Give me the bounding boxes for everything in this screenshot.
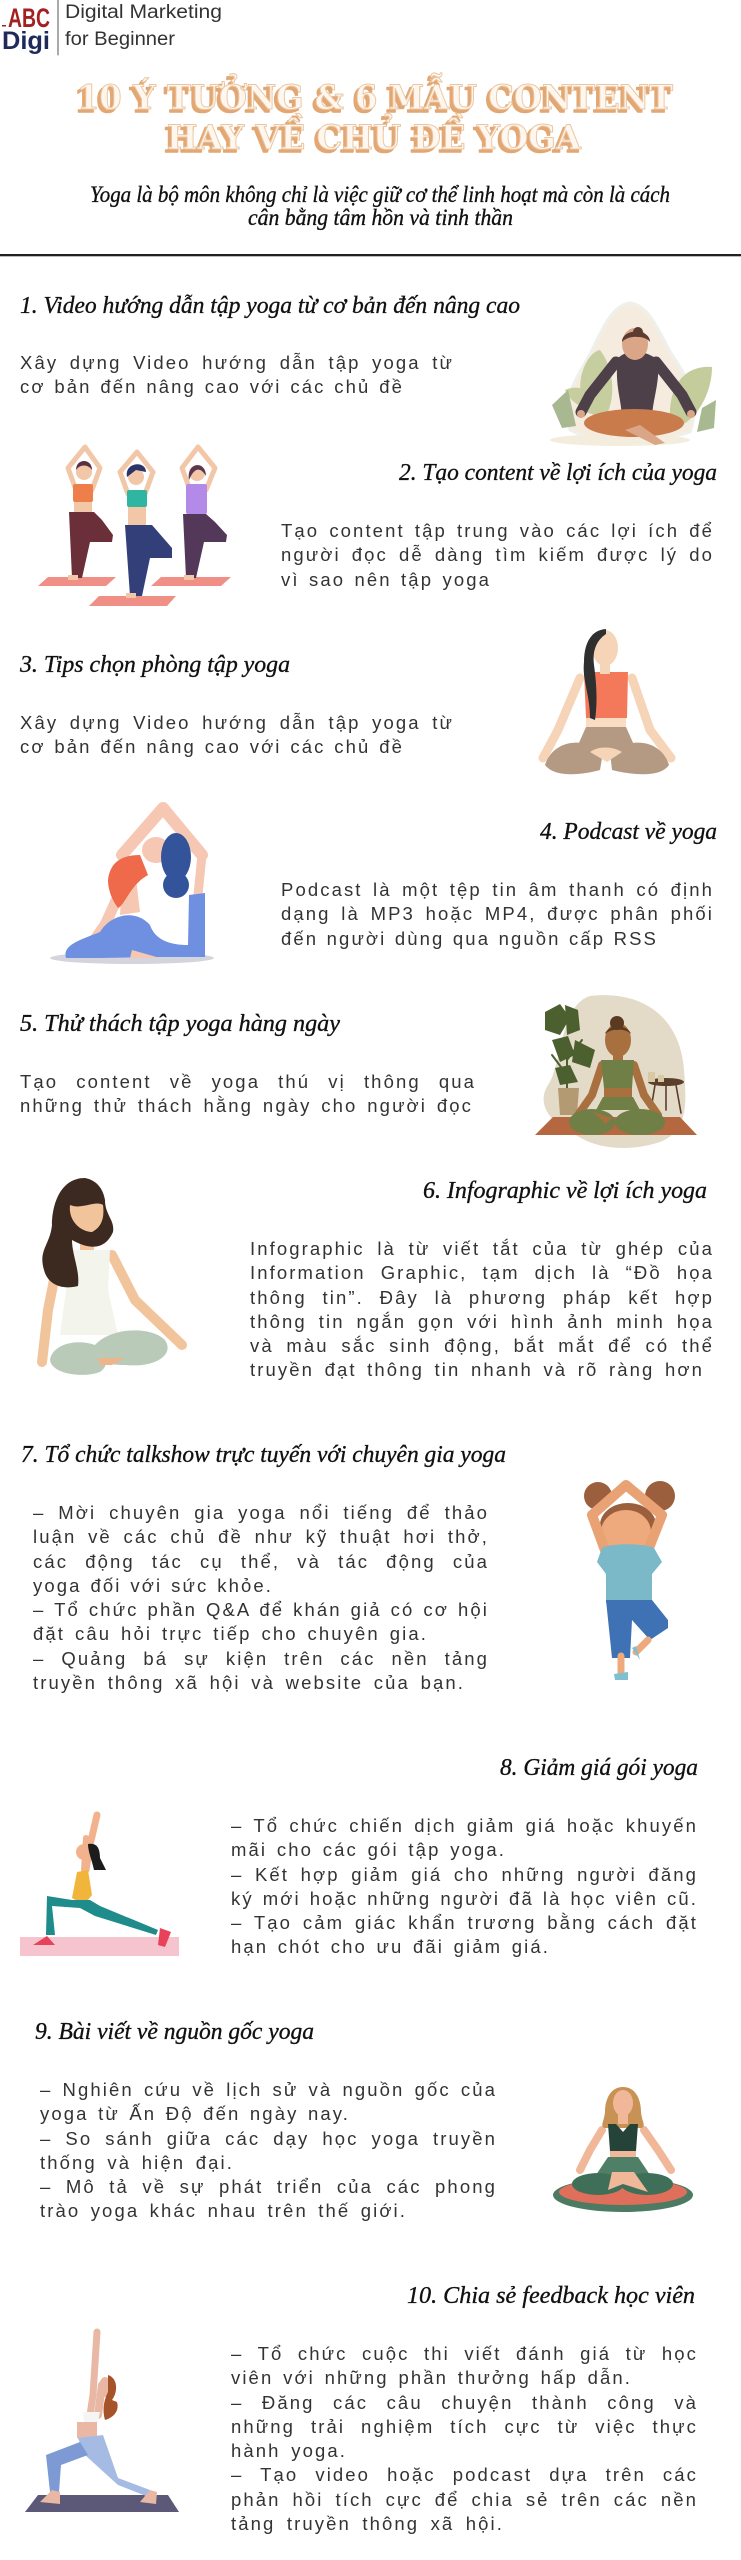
- text block 1: Xây dựng Video hướng dẫn tập yoga từ: [20, 352, 454, 373]
- illustration 1: meditating woman with leaves: [550, 303, 716, 446]
- text block 7: – Quảng bá sự kiện trên các nền tảng: [33, 1648, 489, 1668]
- text block 9: yoga từ Ấn Độ đến ngày nay.: [40, 2103, 350, 2124]
- title: 10 Ý TƯỞNG & 6 MẪU CONTENT: [74, 75, 670, 121]
- text block 10: tảng truyền thông xã hội.: [231, 2513, 504, 2534]
- text block 1: cơ bản đến nâng cao với các chủ đề: [20, 376, 404, 397]
- text block 10: – Tạo video hoặc podcast dựa trên các: [231, 2464, 698, 2485]
- heading 7: 7. Tổ chức talkshow trực tuyến với chuyên gia yoga: [21, 1442, 506, 1468]
- text block 10: – Đăng các câu chuyện thành công và: [231, 2392, 698, 2412]
- illustration 4: backbend pose: [50, 808, 214, 964]
- text block 4: dạng là MP3 hoặc MP4, được phân phối: [281, 903, 714, 924]
- heading 6: 6. Infographic về lợi ích yoga: [423, 1178, 707, 1204]
- text block 2: [281, 520, 714, 590]
- text block 10: những trải nghiệm tích cực từ việc thực: [231, 2416, 698, 2437]
- text block 4: Podcast là một tệp tin âm thanh có định: [281, 879, 714, 900]
- text block 8: – Kết hợp giảm giá cho những người đăng: [231, 1864, 698, 1884]
- text block 5: những thử thách hằng ngày cho người đọc: [20, 1095, 473, 1116]
- text block 5: [20, 1071, 476, 1116]
- text block 6: Infographic là từ viết tắt của từ ghép của: [250, 1238, 714, 1259]
- text block 4: [281, 879, 714, 949]
- text block 7: [33, 1502, 489, 1693]
- text block 7: đặt câu hỏi trực tiếp cho chuyên gia.: [33, 1623, 428, 1644]
- title: 10 Ý TƯỞNG & 6 MẪU CONTENT: [77, 72, 673, 118]
- text block 7: luận về các chủ đề như kỹ thuật hơi thở,: [33, 1526, 489, 1547]
- text block 8: hạn chót cho ưu đãi giảm giá.: [231, 1936, 550, 1957]
- text block 10: viên với những phần thưởng hấp dẫn.: [231, 2367, 632, 2388]
- text block 3: Xây dựng Video hướng dẫn tập yoga từ: [20, 712, 454, 733]
- text block 2: Tạo content tập trung vào các lợi ích để: [281, 520, 714, 541]
- illustration 10: warrior pose on dark mat: [25, 2332, 179, 2512]
- heading 3: 3. Tips chọn phòng tập yoga: [19, 652, 290, 678]
- text block 7: truyền thông xã hội và website của bạn.: [33, 1672, 465, 1693]
- text block 10: [231, 2343, 698, 2534]
- logo: ABC Digi: Digi: [2, 27, 50, 55]
- text block 7: – Mời chuyên gia yoga nổi tiếng để thảo: [33, 1502, 489, 1523]
- illustration 8: lunge pose on pink mat: [20, 1815, 179, 1956]
- text block 6: và màu sắc sinh động, bắt mắt để có thể: [250, 1335, 714, 1356]
- text block 10: hành yoga.: [231, 2440, 347, 2461]
- text block 8: mãi cho các gói tập yoga.: [231, 1839, 506, 1860]
- title: HAY VỀ CHỦ ĐỀ YOGA: [164, 116, 579, 161]
- subtitle: Yoga là bộ môn không chỉ là việc giữ cơ thể linh hoạt mà còn là cách: [90, 182, 670, 207]
- text block 8: ký mới hoặc những người đã là học viên cũ.: [231, 1888, 698, 1909]
- heading 9: 9. Bài viết về nguồn gốc yoga: [35, 2019, 314, 2045]
- header divider: [0, 254, 741, 257]
- heading 1: 1. Video hướng dẫn tập yoga từ cơ bản đến nâng cao: [20, 293, 520, 319]
- text block 3: [20, 712, 454, 757]
- illustration 3: seated woman with braid: [543, 629, 671, 774]
- text block 9: trào yoga khác nhau trên thế giới.: [40, 2200, 407, 2221]
- text block 9: thống và hiện đại.: [40, 2152, 234, 2173]
- heading 8: 8. Giảm giá gói yoga: [500, 1755, 698, 1781]
- logo: ABC Digi: Digital Marketing: [65, 2, 222, 23]
- illustration 9: woman meditating on round mat: [553, 2087, 693, 2212]
- text block 1: [20, 352, 454, 397]
- text block 10: phản hồi tích cực để chia sẻ trên các nền: [231, 2488, 698, 2510]
- text block 6: truyền đạt thông tin nhanh và rõ ràng hơn: [250, 1359, 704, 1380]
- text block 8: – Tổ chức chiến dịch giảm giá hoặc khuyến: [231, 1815, 698, 1836]
- title: HAY VỀ CHỦ ĐỀ YOGA: [167, 113, 582, 158]
- text block 6: [250, 1238, 714, 1380]
- text block 6: thông tin”. Đây là phương pháp kết hợp: [250, 1286, 714, 1308]
- subtitle: cân bằng tâm hồn và tinh thần: [248, 205, 513, 230]
- text block 7: – Tổ chức phần Q&A để khán giả có cơ hội: [33, 1599, 489, 1620]
- text block 2: người đọc dễ dàng tìm kiếm được lý do: [281, 544, 714, 565]
- text block 9: – Nghiên cứu về lịch sử và nguồn gốc của: [40, 2079, 497, 2100]
- logo: ABC Digi: for Beginner: [65, 29, 176, 50]
- text block 3: cơ bản đến nâng cao với các chủ đề: [20, 736, 404, 757]
- text block 6: Information Graphic, tạm dịch là “Đồ họa: [250, 1262, 714, 1283]
- text block 5: Tạo content về yoga thú vị thông qua: [20, 1071, 476, 1092]
- text block 9: – Mô tả về sự phát triển của các phong: [40, 2176, 497, 2197]
- heading 2: 2. Tạo content về lợi ích của yoga: [399, 460, 717, 486]
- illustration 5: woman on mat with plant and table: [535, 995, 697, 1148]
- text block 4: đến người dùng qua nguồn cấp RSS: [281, 928, 658, 948]
- text block 9: – So sánh giữa các dạy học yoga truyền: [40, 2128, 497, 2148]
- heading 4: 4. Podcast về yoga: [540, 819, 717, 845]
- text block 7: yoga đối với sức khỏe.: [33, 1575, 273, 1596]
- heading 10: 10. Chia sẻ feedback học viên: [407, 2283, 695, 2309]
- text block 2: vì sao nên tập yoga: [281, 568, 491, 590]
- text block 6: thông tin ngắn gọn với hình ảnh minh họa: [250, 1311, 714, 1332]
- illustration 2: three women in tree pose: [38, 447, 231, 606]
- logo: ABC Digi: [2, 0, 222, 55]
- text block 10: – Tổ chức cuộc thi viết đánh giá từ học: [231, 2343, 698, 2364]
- title: [74, 72, 673, 161]
- text block 7: các động tác cụ thể, và tác động của: [33, 1550, 489, 1572]
- illustration 6: woman with long hair meditating: [42, 1178, 182, 1375]
- text block 8: [231, 1815, 698, 1957]
- illustration 7: child in tree pose: [584, 1481, 675, 1680]
- logo: ABC Digi: ABC: [8, 3, 50, 33]
- heading 5: 5. Thử thách tập yoga hàng ngày: [20, 1011, 340, 1037]
- text block 8: – Tạo cảm giác khẩn trương bằng cách đặt: [231, 1912, 698, 1933]
- text block 9: [40, 2079, 497, 2221]
- subtitle: [90, 182, 670, 230]
